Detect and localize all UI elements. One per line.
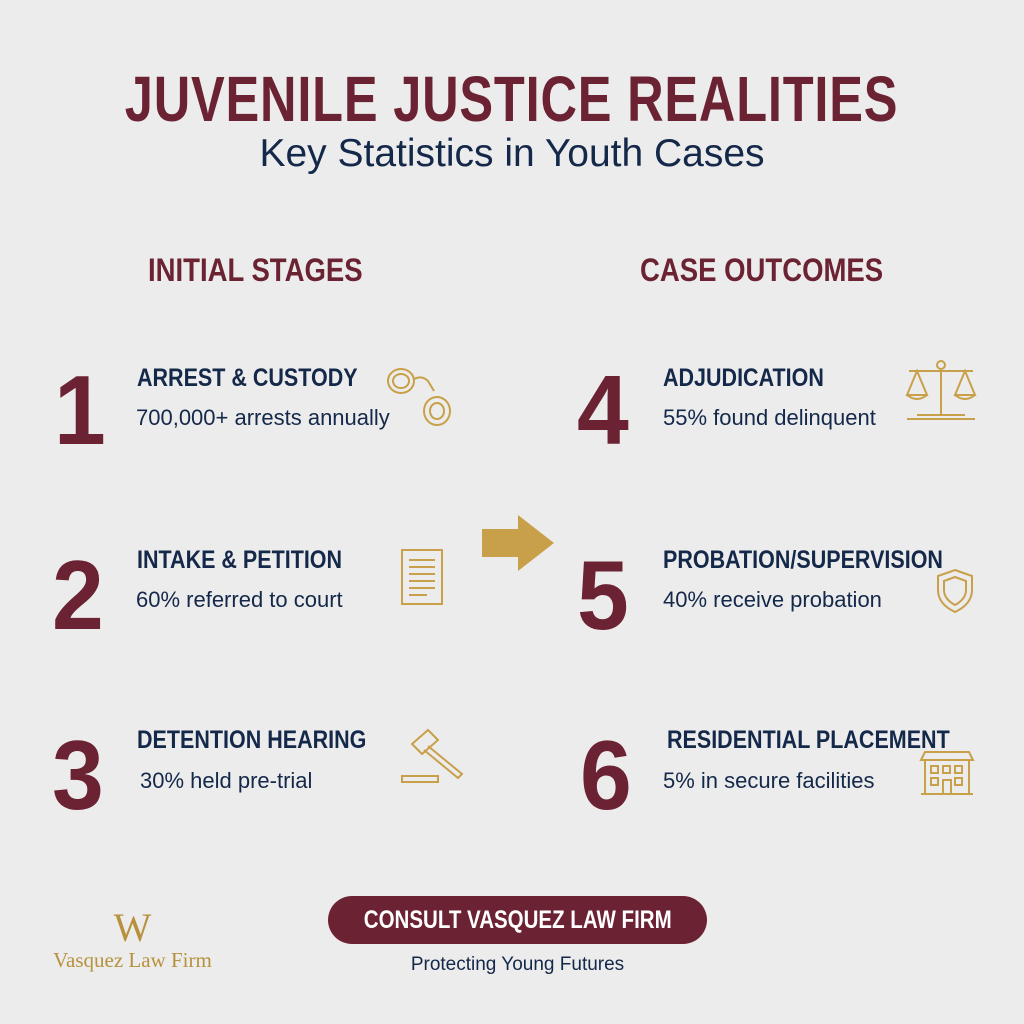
step 1: 700,000+ arrests annually	[136, 405, 390, 430]
step 4: ADJUDICATION	[663, 364, 824, 392]
subtitle: Key Statistics in Youth Cases	[259, 132, 765, 175]
step 3: 3	[52, 720, 104, 830]
heading: initial stages: INITIAL STAGES	[148, 252, 363, 288]
step 2: 60% referred to court	[136, 587, 343, 612]
step 3: DETENTION HEARING	[137, 726, 366, 754]
step 6: 6	[580, 720, 632, 830]
step 5	[577, 540, 973, 650]
step 4	[577, 355, 976, 465]
button: consult: CONSULT VASQUEZ LAW FIRM	[364, 906, 671, 934]
step 4: 55% found delinquent	[663, 405, 876, 430]
step 1: ARREST & CUSTODY	[137, 364, 358, 392]
step 6: 5% in secure facilities	[663, 768, 875, 793]
step 5: PROBATION/SUPERVISION	[663, 546, 943, 574]
step 2: 2	[52, 540, 104, 650]
icon: document	[401, 549, 443, 605]
step 2	[52, 540, 443, 650]
step 6	[580, 720, 974, 830]
logo: W	[114, 905, 151, 950]
step 6: RESIDENTIAL PLACEMENT	[667, 726, 950, 754]
step 5: 40% receive probation	[663, 587, 882, 612]
logo: Vasquez Law Firm	[53, 948, 212, 972]
step 4: 4	[577, 355, 629, 465]
icon: scales	[906, 360, 976, 420]
icon: handcuffs	[387, 368, 451, 426]
step 5: 5	[577, 540, 629, 650]
button: consult	[328, 896, 707, 944]
title: JUVENILE JUSTICE REALITIES	[125, 63, 899, 135]
step 1	[54, 355, 451, 465]
heading: case outcomes: CASE OUTCOMES	[640, 252, 883, 288]
step 3	[52, 720, 464, 830]
icon: building	[920, 751, 974, 795]
arrow	[482, 515, 554, 571]
step 3: 30% held pre-trial	[140, 768, 312, 793]
tagline: Protecting Young Futures	[411, 954, 624, 975]
step 1: 1	[54, 355, 106, 465]
logo	[53, 905, 212, 972]
icon: gavel	[401, 728, 464, 783]
icon: shield	[937, 569, 973, 614]
step 2: INTAKE & PETITION	[137, 546, 342, 574]
